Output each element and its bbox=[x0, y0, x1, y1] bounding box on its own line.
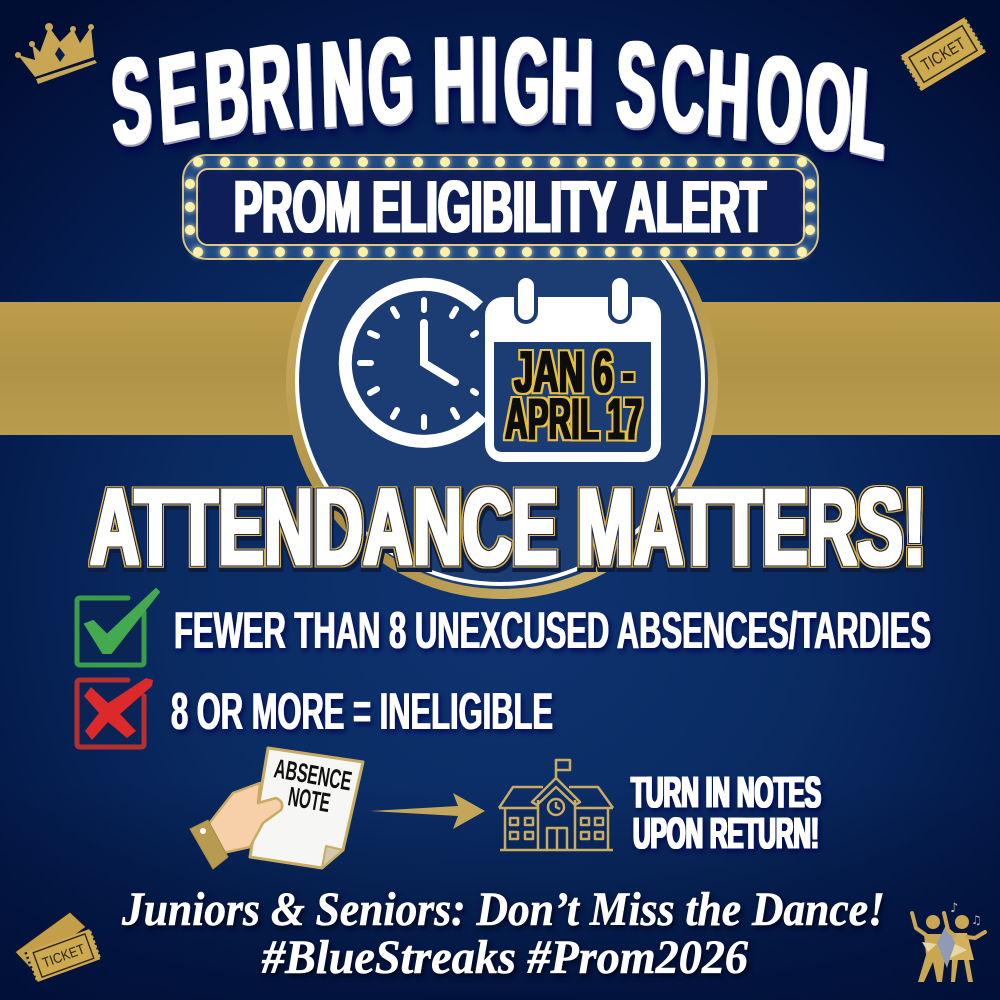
calendar dates: JAN 6 - bbox=[514, 340, 634, 405]
title: SEBRING HIGH SCHOOL bbox=[108, 12, 889, 186]
icon: dancers bbox=[912, 901, 985, 982]
turn in notes text: TURN IN NOTES bbox=[631, 768, 821, 817]
script tagline: Juniors & Seniors: Don’t Miss the Dance! bbox=[121, 883, 885, 936]
icon: school bbox=[499, 760, 613, 850]
icon: dancers: ♫ bbox=[971, 913, 982, 927]
icon: clock bbox=[345, 284, 482, 441]
ineligible text: 8 OR MORE = INELIGIBLE bbox=[171, 683, 553, 741]
note text bbox=[272, 753, 354, 818]
marquee banner bbox=[183, 155, 818, 259]
icon: crown bbox=[15, 23, 97, 84]
icon: green check bbox=[77, 589, 159, 665]
icon: hand holding absence note bbox=[190, 748, 363, 869]
icon: red x bbox=[77, 678, 153, 747]
icon: ticket top right bbox=[900, 17, 986, 91]
calendar dates bbox=[505, 340, 642, 452]
turn in notes text: UPON RETURN! bbox=[633, 809, 819, 858]
icon: tickets bottom left bbox=[15, 912, 101, 982]
icon: tickets bottom left: TICKET bbox=[40, 940, 87, 971]
turn in notes text bbox=[631, 768, 821, 858]
icon: calendar bbox=[485, 276, 661, 462]
calendar dates: APRIL 17 bbox=[505, 387, 642, 452]
script tagline bbox=[121, 883, 885, 984]
arrow bbox=[370, 793, 485, 829]
note text: NOTE bbox=[286, 781, 333, 818]
cuff bbox=[190, 820, 228, 869]
music notes: ♪ bbox=[950, 901, 958, 916]
gold band bbox=[0, 302, 1000, 435]
hand bbox=[208, 783, 282, 853]
marquee lights bbox=[185, 157, 815, 257]
icon: ticket top right: TICKET bbox=[918, 34, 969, 75]
circle emblem bbox=[291, 172, 713, 594]
script tagline: #BlueStreaks #Prom2026 bbox=[261, 931, 748, 984]
note paper bbox=[250, 748, 363, 868]
note text: ABSENCE bbox=[272, 753, 354, 796]
